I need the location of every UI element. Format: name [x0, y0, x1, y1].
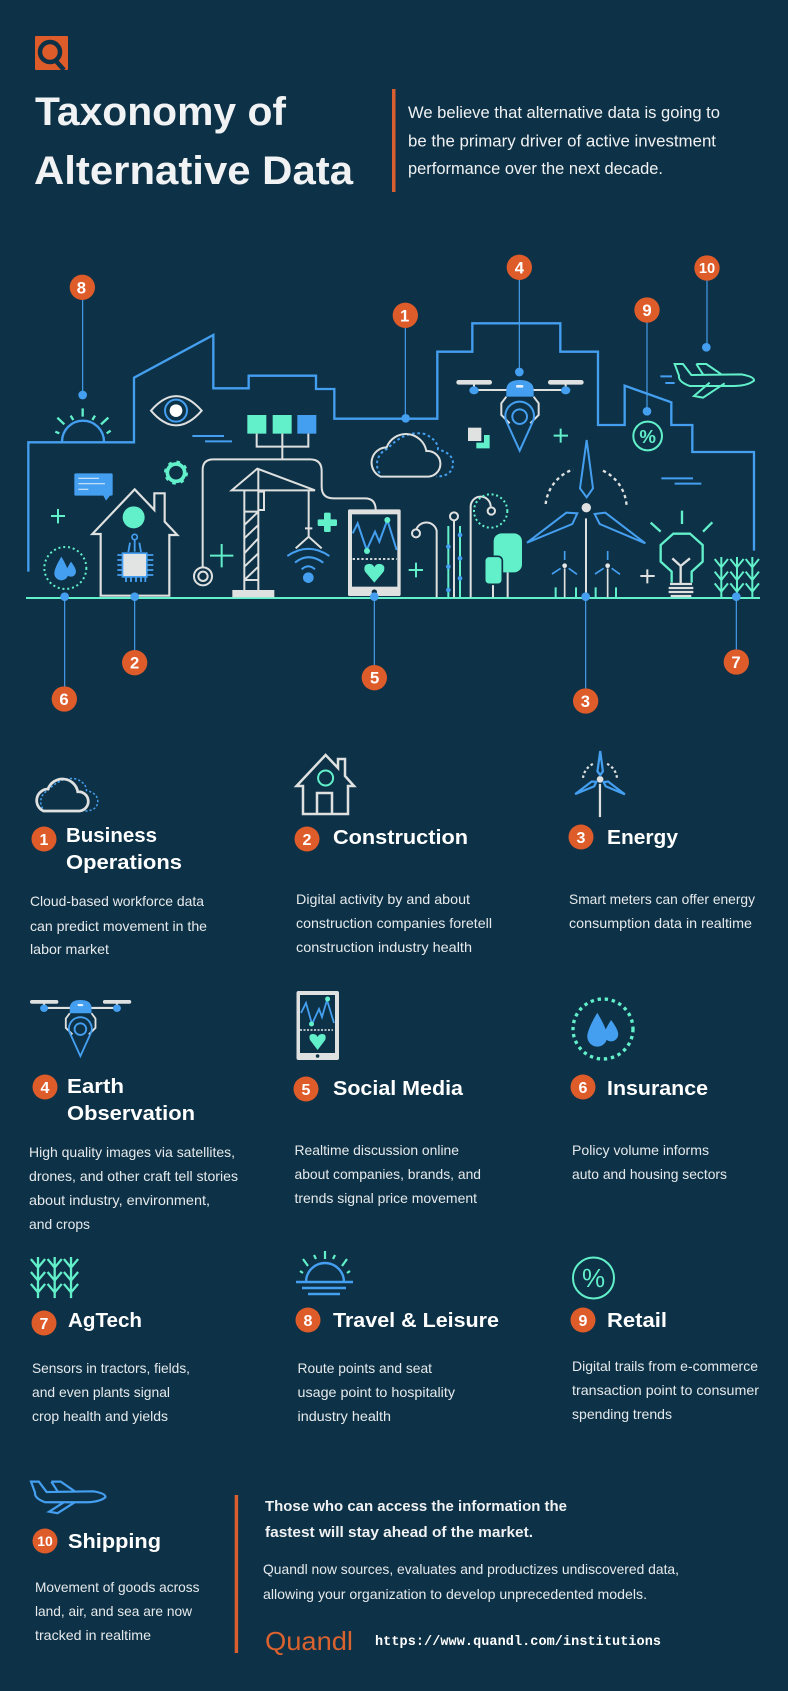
icon: water drops: [573, 999, 633, 1059]
number badges on illustration: 5: [370, 669, 379, 688]
icon: plants: [715, 557, 759, 597]
text block: Smart meters can offer energy: [569, 891, 755, 907]
title: Alternative Data: [34, 149, 354, 193]
icon: wifi: [287, 549, 329, 583]
text block: Realtime discussion online: [294, 1142, 459, 1158]
panel: 4 Earth Observation: [29, 1000, 238, 1232]
text block: [572, 1142, 727, 1182]
badge: [570, 1308, 596, 1332]
callout: closing statement: [265, 1498, 567, 1541]
panel: 3 Energy: [568, 751, 755, 931]
number badges on illustration: 3: [581, 692, 590, 711]
icon: percent: %: [582, 1263, 605, 1293]
text block: closing body: Quandl now sources, evaluates and productizes undiscovered data,: [263, 1561, 679, 1577]
badge: 2: [303, 832, 312, 849]
text block: about industry, environment,: [29, 1192, 210, 1208]
panel: 6 Insurance: [570, 999, 727, 1182]
text block: Sensors in tractors, fields,: [32, 1360, 190, 1376]
icon: crane: [232, 469, 322, 597]
text block: [296, 891, 492, 955]
heading: Social Media: [333, 1078, 464, 1100]
text block: Cloud-based workforce data: [30, 893, 204, 909]
text block: [30, 893, 207, 957]
badge: 10: [37, 1533, 53, 1549]
icon: percent: %: [639, 426, 656, 447]
icon: data squares and pipe: [194, 415, 376, 585]
icon: plus signs: [409, 429, 568, 577]
icon: sun: [55, 408, 111, 442]
icon: trees: [485, 533, 522, 597]
icon: percent: [573, 1258, 614, 1298]
badge: 8: [304, 1313, 313, 1330]
panel: 9 Retail: [570, 1258, 759, 1422]
icon: street lamps: [412, 494, 507, 597]
heading: Operations: [66, 852, 182, 874]
panel: 1 Business Operations: [30, 778, 207, 957]
number badges on illustration: 4: [515, 258, 525, 277]
text block: [572, 1358, 759, 1422]
text block: intro: be the primary driver of active investment: [408, 132, 716, 150]
heading: Travel & Leisure: [333, 1310, 499, 1332]
icon: squares: [468, 428, 490, 448]
icon: drone: [459, 380, 581, 451]
text block: intro: [408, 104, 720, 178]
icon: chat bubble: [74, 473, 113, 501]
icon: plus signs: [51, 509, 233, 567]
text block: auto and housing sectors: [572, 1166, 727, 1182]
text block: trends signal price movement: [294, 1190, 477, 1206]
ground line: [26, 595, 760, 601]
badge: 4: [41, 1080, 50, 1097]
heading: Construction: [333, 827, 468, 849]
icon: medical plus: [318, 513, 337, 532]
icon: small turbines: [552, 551, 620, 597]
panel: 10 Shipping: [31, 1482, 200, 1643]
divider: footer bar: [235, 1495, 238, 1653]
text block: usage point to hospitality: [298, 1384, 455, 1400]
text block: Digital activity by and about: [296, 891, 470, 907]
icon: turbine: [575, 751, 625, 817]
text block: land, air, and sea are now: [35, 1603, 193, 1619]
title: [34, 90, 354, 193]
icon: gear: [165, 462, 187, 484]
icon: gray plus: [640, 569, 655, 583]
number badges on illustration: 7: [731, 653, 741, 672]
speed lines: [192, 436, 232, 441]
text block: tracked in realtime: [35, 1627, 151, 1643]
badge: [294, 1076, 318, 1102]
icon: percent: [633, 422, 662, 450]
callout: closing statement: Those who can access the information the: [265, 1498, 567, 1515]
right half of illustration: [372, 364, 759, 597]
heading: Energy: [607, 827, 679, 849]
text block: intro: We believe that alternative data is going to: [408, 104, 720, 122]
callout: closing statement: fastest will stay ahead of the market.: [265, 1524, 533, 1541]
icon: plants: [31, 1257, 78, 1298]
icon: house: [296, 755, 354, 814]
number badges on illustration: 10: [699, 261, 715, 277]
heading: Observation: [67, 1103, 195, 1125]
icon: eye: [151, 396, 202, 425]
text block: closing body: [263, 1561, 679, 1602]
text block: Digital trails from e-commerce: [572, 1358, 758, 1374]
text block: and crops: [29, 1216, 90, 1232]
text block: transaction point to consumer: [572, 1382, 759, 1398]
panel: 5 Social Media: [294, 991, 481, 1206]
leader lines and dots: [60, 279, 741, 689]
icon: water drops: [44, 547, 86, 589]
text block: spending trends: [572, 1406, 672, 1422]
badge: [32, 1074, 58, 1100]
panel: 7 AgTech: [31, 1257, 190, 1424]
icon: sunset: [296, 1251, 353, 1294]
heading: Retail: [607, 1310, 667, 1332]
text block: labor market: [30, 941, 109, 957]
text block: Policy volume informs: [572, 1142, 709, 1158]
text block: [32, 1360, 190, 1424]
icon: drone: [32, 1000, 129, 1056]
heading: [67, 1076, 195, 1125]
badge: 5: [302, 1082, 311, 1099]
heading: Insurance: [607, 1078, 708, 1100]
text block: construction industry health: [296, 939, 472, 955]
chart: city illustration: [26, 255, 760, 714]
heading: Earth: [67, 1076, 124, 1098]
text block: intro: performance over the next decade.: [408, 160, 663, 178]
text block: drones, and other craft tell stories: [29, 1168, 238, 1184]
icon: tablet: [348, 509, 401, 596]
badge: 6: [579, 1080, 588, 1097]
text block: industry health: [298, 1408, 391, 1424]
badge: [568, 824, 594, 850]
text block: Movement of goods across: [35, 1579, 200, 1595]
heading: AgTech: [68, 1310, 142, 1332]
url: https://www.quandl.com/institutions: [375, 1635, 661, 1650]
text block: can predict movement in the: [30, 918, 207, 934]
icon: cloud: [37, 778, 98, 811]
skyline outline: [28, 323, 754, 572]
icon: Quandl logo: [35, 36, 68, 70]
text block: [294, 1142, 481, 1206]
badge: 1: [40, 832, 49, 849]
icon: airplane: [660, 364, 754, 398]
text block: about companies, brands, and: [294, 1166, 481, 1182]
icon: light bulb: [651, 511, 712, 596]
panel: 2 Construction: [294, 755, 492, 955]
text block: [298, 1360, 455, 1424]
text block: crop health and yields: [32, 1408, 168, 1424]
text block: and even plants signal: [32, 1384, 170, 1400]
heading: Business: [66, 825, 157, 847]
number badges on illustration: [52, 255, 749, 714]
text block: [569, 891, 755, 931]
text block: construction companies foretell: [296, 915, 492, 931]
logo wordmark: Quandl: [265, 1626, 353, 1656]
panel: 8 Travel & Leisure: [296, 1251, 499, 1424]
text block: closing body: allowing your organization to develop unprecedented models.: [263, 1586, 647, 1602]
badge: 7: [40, 1316, 49, 1333]
icon: house with chip: [92, 489, 177, 596]
icon: phone: [296, 991, 339, 1060]
number badges on illustration: 2: [130, 654, 139, 673]
divider: intro bar: [392, 89, 396, 192]
number badges on illustration: 8: [77, 278, 86, 297]
text block: High quality images via satellites,: [29, 1144, 235, 1160]
badge: [294, 826, 320, 852]
badge: [32, 1528, 58, 1554]
badge: [570, 1074, 596, 1100]
number badges on illustration: 6: [59, 690, 69, 709]
badge: 3: [577, 830, 586, 847]
badge: 9: [579, 1313, 588, 1330]
title: Taxonomy of: [35, 90, 287, 134]
icon: wind turbine: [527, 440, 645, 597]
text block: [35, 1579, 200, 1643]
heading: Shipping: [68, 1531, 161, 1553]
number badges on illustration: 1: [400, 306, 409, 325]
badge: [32, 826, 56, 852]
text block: Route points and seat: [298, 1360, 432, 1376]
heading: [66, 825, 182, 874]
text block: consumption data in realtime: [569, 915, 752, 931]
number badges on illustration: 9: [642, 301, 652, 320]
badge: [296, 1308, 320, 1332]
icon: cloud: [372, 433, 453, 477]
icon: airplane: [31, 1482, 105, 1513]
speed lines: [661, 478, 701, 484]
text block: [29, 1144, 238, 1232]
badge: [32, 1310, 56, 1336]
